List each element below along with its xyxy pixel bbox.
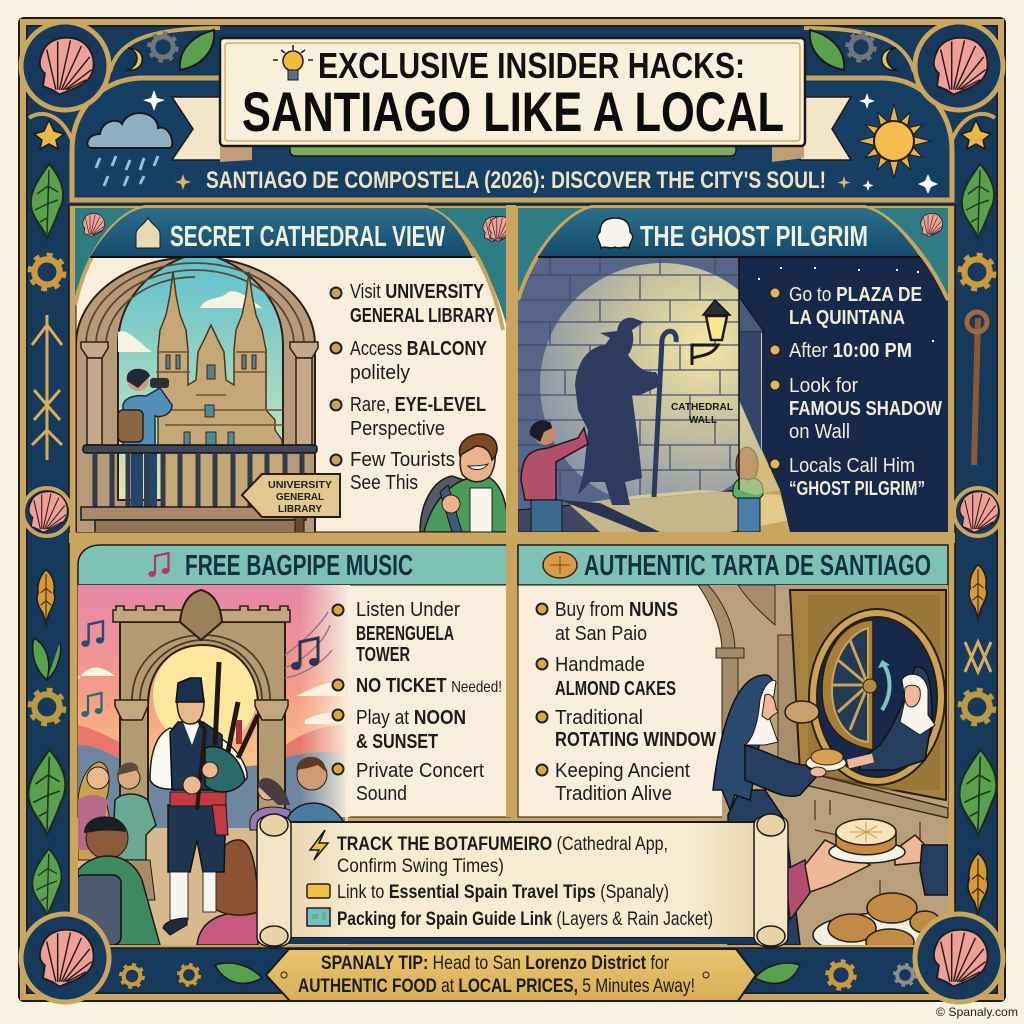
icon: music note: [148, 553, 169, 577]
bullets: ALMOND CAKES: [555, 678, 676, 700]
dark text panel: After 10:00 PM: [789, 340, 912, 362]
stone arch: [76, 252, 318, 535]
top ornaments: moon, gear, leaf: [128, 30, 896, 70]
bullets: Traditional: [555, 707, 643, 729]
bullets: ROTATING WINDOW: [555, 729, 716, 751]
left column ornaments: [23, 120, 71, 915]
child pointing: [521, 420, 588, 532]
stone arch: [113, 590, 290, 830]
title line 1: EXCLUSIVE INSIDER HACKS:: [318, 45, 745, 86]
local guide with backpack: [420, 434, 508, 532]
bullets: See This: [350, 472, 418, 494]
illustration: shadow on cathedral wall: [518, 257, 790, 532]
tip text: TRACK THE BOTAFUMEIRO (Cathedral App,: [337, 833, 668, 855]
corners outside arch: [75, 208, 508, 330]
content background: [518, 585, 948, 817]
bullets: TOWER: [356, 644, 410, 666]
bullets: politely: [350, 362, 410, 384]
panel: authentic tarta de santiago: [518, 545, 957, 957]
illustration: bagpiper under arch: [75, 585, 350, 945]
stone ledge: [808, 786, 823, 790]
signpost: [242, 474, 340, 533]
signpost: LIBRARY: [278, 503, 322, 515]
panel dividers: [69, 205, 955, 817]
tip text: [337, 833, 713, 930]
bullets: [332, 599, 502, 805]
balcony: [81, 445, 317, 533]
icon: ghost: [597, 218, 633, 248]
left nun: [713, 675, 846, 945]
icon: ticket: [307, 884, 330, 898]
audience: [75, 757, 345, 945]
bullets: BERENGUELA: [356, 623, 454, 645]
header band: [489, 207, 948, 300]
spanaly tip banner: AUTHENTIC FOOD at LOCAL PRICES, 5 Minutes Away!: [298, 975, 695, 997]
bullets: Private Concert: [356, 760, 484, 782]
tip text: Packing for Spain Guide Link (Layers & Rain Jacket): [337, 908, 713, 930]
bottom ornaments: [121, 961, 915, 989]
person with binoculars: [118, 369, 172, 507]
wall lamp: [692, 300, 730, 365]
tip text: Link to Essential Spain Travel Tips (Spanaly): [337, 881, 669, 903]
corner medallion: top left: [21, 22, 109, 110]
subtitle: SANTIAGO DE COMPOSTELA (2026): DISCOVER THE CITY'S SOUL!: [206, 167, 826, 194]
header band: [518, 545, 948, 585]
header band: [78, 545, 510, 585]
bullets: Rare, EYE-LEVEL: [350, 394, 486, 416]
cream fade: [300, 585, 350, 817]
title ribbons: [172, 97, 851, 162]
bullets: Handmade: [555, 654, 645, 676]
bullets: Perspective: [350, 418, 445, 440]
copyright: © Spanaly.com: [936, 1005, 1018, 1019]
dark text panel: Go to PLAZA DE: [789, 284, 922, 306]
illustration: arch and cathedral from balcony: [76, 252, 508, 535]
icon: cathedral: [136, 218, 160, 248]
bullets: GENERAL LIBRARY: [350, 305, 495, 327]
dark text panel: Look for: [789, 375, 858, 397]
signpost: UNIVERSITY: [268, 479, 332, 491]
bagpiper: [150, 662, 258, 935]
tip text: Confirm Swing Times): [337, 855, 504, 877]
dark text panel: FAMOUS SHADOW: [789, 398, 942, 420]
icon: light bulb: [273, 45, 313, 80]
icon: tarta: [543, 552, 577, 578]
dark text panel: [739, 257, 948, 532]
dark text panel: “GHOST PILGRIM”: [789, 478, 925, 500]
bullets: [330, 281, 495, 494]
panel: secret cathedral view: [75, 207, 508, 535]
child watching: [733, 447, 763, 532]
heading: SECRET CATHEDRAL VIEW: [170, 221, 445, 253]
header arch: [72, 78, 952, 200]
bullets: & SUNSET: [356, 731, 438, 753]
content background: [78, 585, 510, 817]
icon: map: [307, 908, 330, 926]
cake and hands: [788, 818, 948, 945]
bullets: Listen Under: [356, 599, 460, 621]
content background: [76, 257, 508, 532]
bullets: Tradition Alive: [555, 783, 672, 805]
heading: THE GHOST PILGRIM: [640, 221, 868, 253]
bullets: Access BALCONY: [350, 338, 488, 360]
spanaly tip banner: [266, 949, 756, 1001]
heading: FREE BAGPIPE MUSIC: [185, 550, 413, 582]
dark text panel: LA QUINTANA: [789, 307, 905, 329]
dark text panel: on Wall: [789, 421, 850, 443]
signpost: GENERAL: [276, 491, 325, 503]
corner medallion: top right: [915, 22, 1003, 110]
bullets: Sound: [356, 783, 407, 805]
scroll with extra tips: [257, 814, 788, 947]
panel: the ghost pilgrim: [489, 207, 948, 532]
icon: lightning: [310, 830, 328, 860]
cathedral: [156, 272, 283, 446]
cloud and rain icon: [87, 90, 172, 186]
title plate: [220, 38, 805, 146]
window frame: [790, 590, 946, 800]
corner medallion: bottom right: [915, 914, 1003, 1002]
bullets: [536, 599, 716, 805]
bullets: Keeping Ancient: [555, 760, 690, 782]
bullets: Play at NOON: [356, 707, 466, 729]
corner medallion: bottom left: [21, 914, 109, 1002]
clouds: [118, 291, 262, 352]
bullets: Visit UNIVERSITY: [350, 281, 485, 303]
bullets: Buy from NUNS: [555, 599, 678, 621]
lit pavement: [570, 490, 790, 532]
spanaly tip banner: SPANALY TIP: Head to San Lorenzo District for: [321, 952, 669, 974]
sun icon: [857, 93, 938, 194]
header band: [75, 207, 507, 330]
panel: free bagpipe music: [75, 545, 510, 945]
bullets: Few Tourists: [350, 449, 455, 471]
wall label: CATHEDRAL: [671, 401, 734, 413]
bullets: NO TICKET Needed!: [356, 675, 502, 697]
illustration: shadow on cathedral wall: WALL: [689, 414, 718, 426]
window nun: [848, 667, 935, 770]
right column ornaments: [954, 120, 1002, 914]
corners outside arch: [518, 208, 948, 300]
illustration: nuns at rotating window: [698, 585, 957, 957]
title line 2: SANTIAGO LIKE A LOCAL: [242, 80, 784, 143]
dark text panel: Locals Call Him: [789, 455, 915, 477]
notes: [81, 612, 332, 717]
bullets: at San Paio: [555, 623, 647, 645]
shadow figure: [575, 318, 662, 505]
